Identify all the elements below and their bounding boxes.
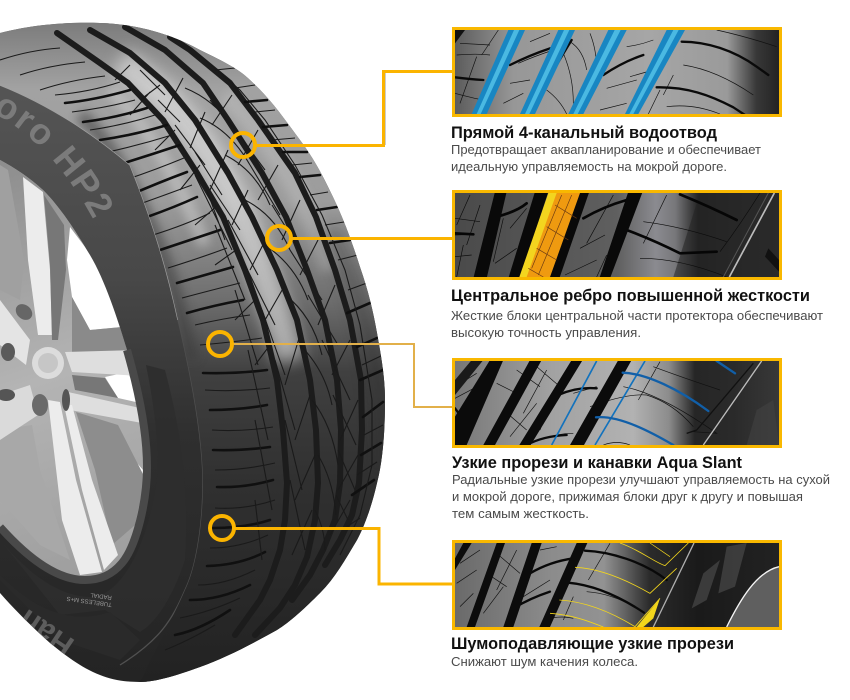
thick shoulder sipes [65, 90, 383, 635]
sidewall details: Han [12, 602, 80, 664]
sidewall details: RADIAL [89, 591, 112, 600]
tire rubber body [0, 23, 385, 682]
panel: straight 4-channel drainage [451, 28, 780, 174]
connector 2 with ring [267, 226, 452, 250]
description: высокую точность управления. [451, 325, 641, 340]
description: и мокрой дороге, прижимая блоки друг к другу и повышая [452, 489, 803, 504]
photo: blue sipes [455, 361, 779, 445]
thin tread sipes [0, 48, 383, 650]
description [451, 142, 761, 174]
window gaps [67, 227, 145, 478]
connector 3 with ring [208, 332, 452, 407]
description: Предотвращает аквапланирование и обеспечивает [451, 142, 761, 157]
photo: blue grooves [455, 30, 779, 114]
panel: noise-reducing sipes [451, 542, 780, 669]
lug holes [16, 304, 32, 320]
connector 4 with ring [210, 516, 452, 584]
description [451, 308, 823, 340]
sidewall brand text [0, 112, 136, 305]
description: Снижают шум качения колеса. [451, 654, 638, 669]
panel frame [454, 28, 780, 116]
alloy wheel [0, 160, 143, 576]
heading: Шумоподавляющие узкие прорези [451, 634, 734, 653]
panel: Aqua Slant sipes [452, 360, 830, 521]
panel frame [454, 360, 780, 446]
panel frame [454, 192, 780, 278]
photo: yellow sipes [455, 543, 779, 627]
photo: yellow rib [455, 193, 779, 277]
hub [32, 347, 64, 379]
heading: Центральное ребро повышенной жесткости [451, 286, 810, 305]
panel frame [454, 542, 780, 628]
connector 1 with ring [231, 72, 452, 157]
description: идеальную управляемость на мокрой дороге. [451, 159, 727, 174]
heading: Прямой 4-канальный водоотвод [451, 123, 717, 142]
description: тем самым жесткость. [452, 506, 589, 521]
panel: rigid central rib [451, 192, 823, 340]
tread surface [0, 0, 400, 700]
spokes [0, 165, 16, 226]
sidewall details: TUBELESS M+S [66, 595, 112, 607]
sidewall details [0, 85, 203, 666]
description: Радиальные узкие прорези улучшают управляемость на сухой [452, 472, 830, 487]
description [452, 472, 830, 521]
description: Жесткие блоки центральной части протектора обеспечивают [451, 308, 823, 323]
tire illustration [0, 22, 385, 682]
heading: Узкие прорези и канавки Aqua Slant [452, 453, 742, 472]
circumferential grooves [57, 27, 362, 635]
